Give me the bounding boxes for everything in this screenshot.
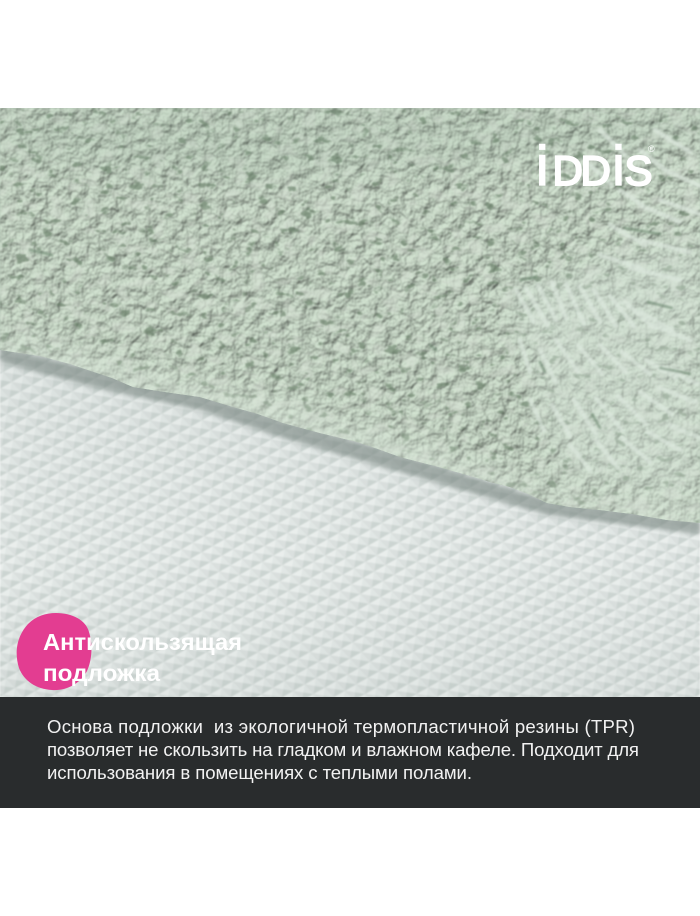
- description text: позволяет не скользить на гладком и влажном кафеле. Подходит для: [47, 739, 639, 760]
- green rug pile: [0, 108, 700, 540]
- description text: использования в помещениях с теплыми полами.: [47, 762, 472, 783]
- heading: anti-slip backing: [43, 629, 242, 686]
- rug strands and dark folds: [30, 130, 700, 470]
- product photo: rug and rubber backing: [0, 108, 700, 700]
- logo: IDDIS: DD: [552, 147, 611, 194]
- heading: anti-slip backing: Антискользящая: [43, 629, 242, 655]
- description text: Основа подложки из экологичной термопластичной резины (TPR): [47, 716, 635, 737]
- logo: IDDIS: i: [612, 134, 625, 197]
- description text: [47, 716, 639, 783]
- logo: IDDIS: [536, 134, 655, 197]
- bullet: pink blob: [17, 613, 91, 690]
- logo: IDDIS: ®: [648, 144, 655, 154]
- description panel: [0, 697, 700, 808]
- logo: IDDIS: S: [624, 147, 653, 194]
- heading: anti-slip backing: подложка: [43, 660, 160, 686]
- logo: IDDIS: i: [536, 134, 548, 197]
- rubber backing texture: [0, 340, 700, 700]
- shadow under rug: [0, 347, 700, 534]
